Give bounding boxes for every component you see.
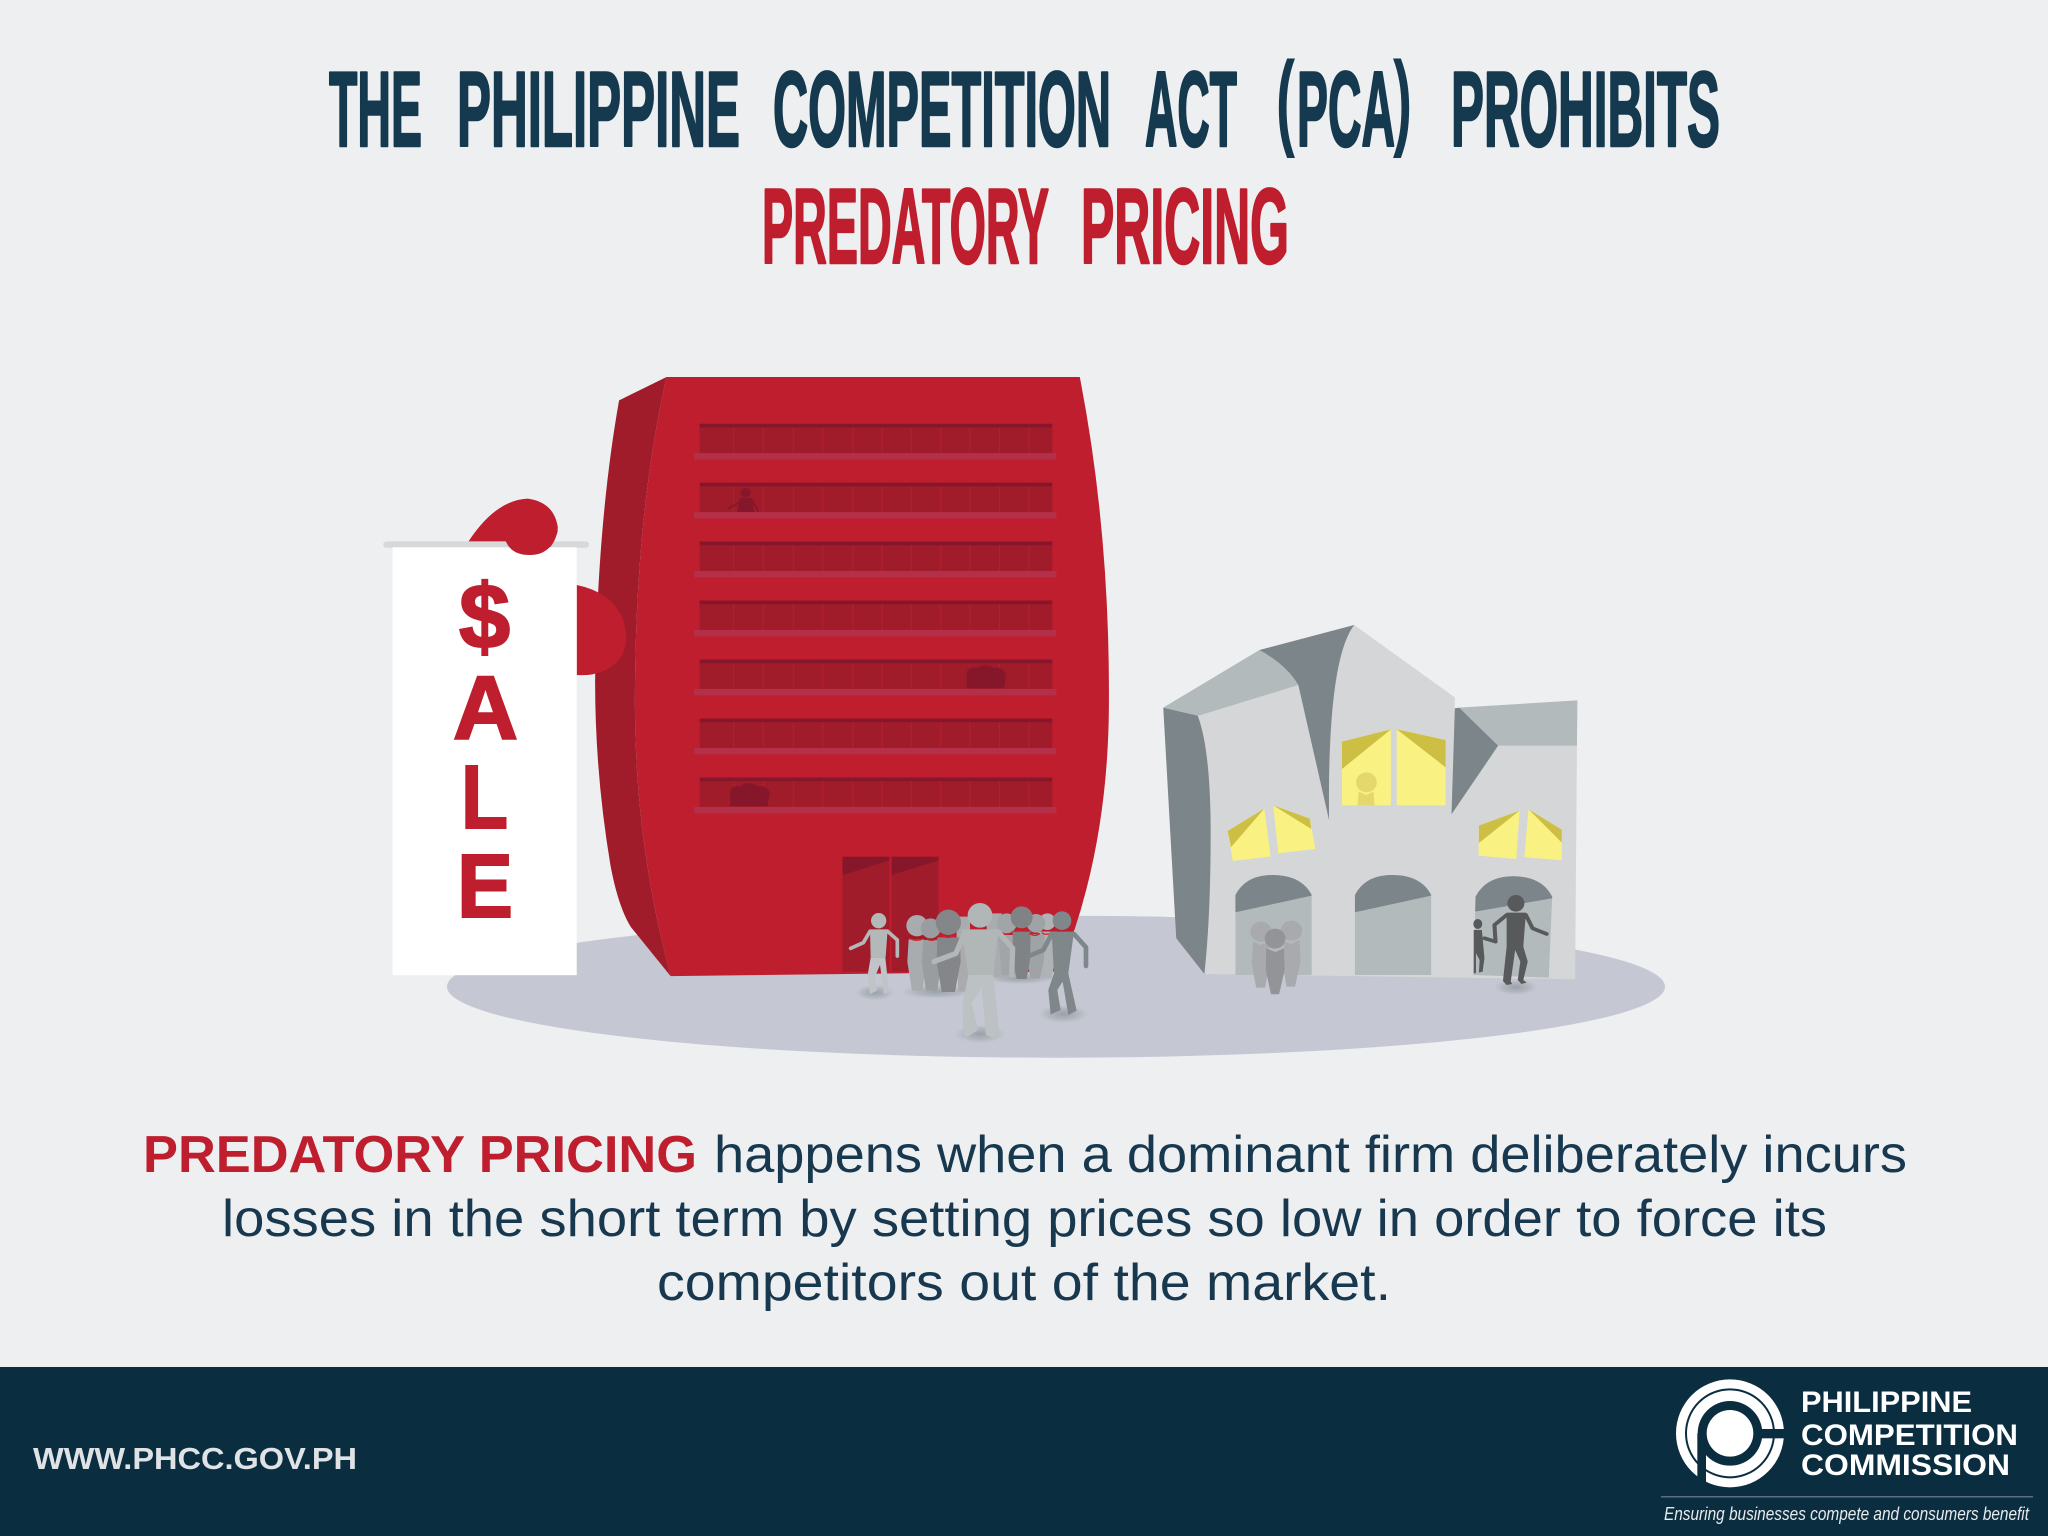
person centre <box>934 903 1013 1038</box>
fingertip over banner <box>506 530 558 555</box>
ground ellipse <box>447 916 1665 1058</box>
roof and side planes <box>1163 708 1211 974</box>
logo text: COMPETITION <box>1801 1419 2018 1452</box>
hand top <box>469 499 558 555</box>
title: THE <box>329 49 422 169</box>
sale letters: $ <box>459 566 510 668</box>
banner rod <box>383 541 589 548</box>
windows <box>694 424 1056 813</box>
description: losses in the short term by setting prices so low in order to force its <box>222 1190 1827 1248</box>
centre window <box>1342 729 1446 805</box>
description: PREDATORY PRICING <box>143 1126 697 1184</box>
sale letters <box>453 566 518 937</box>
title <box>329 39 1720 169</box>
title: PHILIPPINE <box>457 49 740 169</box>
logo text: COMMISSION <box>1801 1449 2010 1482</box>
website: WWW.PHCC.GOV.PH <box>33 1441 357 1476</box>
shadows <box>855 985 895 1001</box>
title: ACT <box>1145 49 1237 169</box>
people in left door <box>1250 921 1302 994</box>
logo mark <box>1676 1379 1786 1490</box>
illustration: red dominant building with sale banner <box>383 377 1109 976</box>
logo text <box>1801 1386 2018 1482</box>
left window <box>1228 805 1315 861</box>
adult and child <box>1473 895 1547 995</box>
door <box>843 857 938 972</box>
hand right <box>577 585 626 675</box>
person left <box>851 913 897 994</box>
person right <box>1027 911 1086 1015</box>
sale letters: A <box>453 659 518 759</box>
description: competitors out of the market. <box>657 1254 1391 1312</box>
right crowd <box>986 906 1057 979</box>
crowd at the big building <box>851 903 1089 1043</box>
text: PROHIBITS <box>1451 49 1720 169</box>
sale letters: E <box>457 837 513 937</box>
sale banner <box>393 547 577 975</box>
title: ) <box>1393 39 1412 159</box>
sale letters: L <box>461 748 508 848</box>
logo text: PHILIPPINE <box>1801 1386 1972 1419</box>
title: PCA <box>1297 49 1395 169</box>
right window <box>1479 809 1562 860</box>
building front <box>635 377 1109 976</box>
title: COMPETITION <box>773 49 1111 169</box>
building side <box>595 377 671 976</box>
subtitle: PREDATORY <box>762 166 1049 286</box>
arched doors <box>1235 875 1552 978</box>
silhouettes in windows <box>728 488 1006 806</box>
left crowd <box>906 910 970 992</box>
footer band <box>0 1367 2048 1536</box>
title: ( <box>1276 39 1295 159</box>
text: PRICING <box>1081 166 1289 286</box>
logo divider <box>1661 1496 2033 1498</box>
description: happens when a dominant firm deliberately incurs <box>714 1126 1907 1184</box>
description <box>143 1126 1907 1312</box>
illustration: small grey competitor building <box>1163 625 1577 995</box>
wall <box>1163 625 1577 979</box>
